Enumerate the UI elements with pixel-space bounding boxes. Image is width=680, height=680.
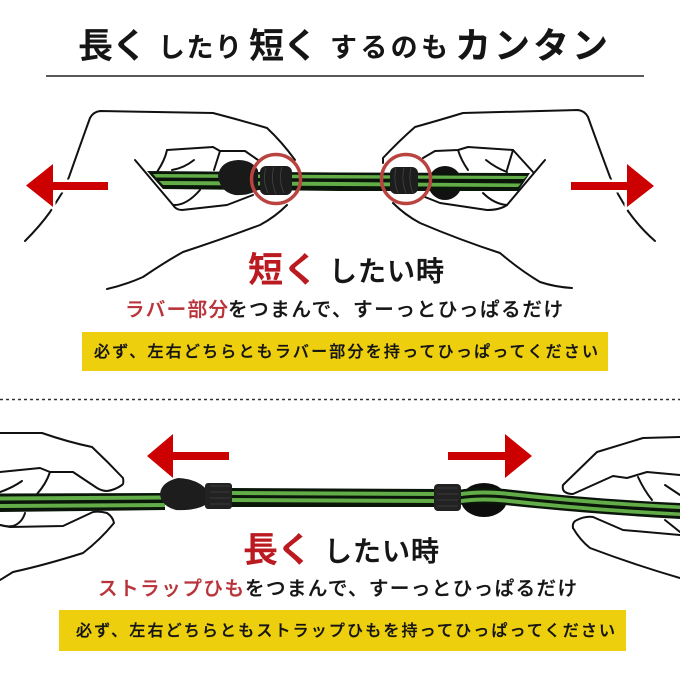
callout: shorten note [82, 332, 608, 371]
highlight circle, left [252, 154, 300, 204]
text: shorten instruction: をつまんで、すーっとひっぱるだけ [228, 299, 563, 321]
rubber stopper, right [390, 167, 418, 194]
arrow: right [448, 434, 532, 478]
title: 長く [78, 27, 147, 66]
strap [147, 171, 530, 191]
rubber stopper, left [260, 166, 292, 195]
icon: right hand outline [383, 110, 655, 288]
title: したり [158, 33, 242, 63]
title [78, 25, 608, 66]
text: lengthen instruction: ストラップひも [98, 578, 244, 600]
strap [0, 488, 680, 519]
callout: lengthen note: 必ず、左右どちらともストラップひもを持ってひっぱってください [76, 622, 615, 640]
title: 短く [249, 27, 318, 66]
panel: shorten illustration [25, 110, 655, 289]
arrow: right [571, 164, 654, 207]
text: lengthen instruction [98, 578, 577, 600]
title: するのも [330, 33, 448, 63]
heading: shorten [248, 251, 444, 290]
text: shorten instruction: ラバー部分 [125, 299, 228, 321]
icon: left hand outline [0, 433, 123, 580]
rubber stopper, left [205, 483, 232, 509]
callout: lengthen note [59, 610, 626, 651]
highlight circle, right [382, 154, 430, 204]
panel: lengthen illustration [0, 433, 680, 580]
heading: shorten: 短く [248, 251, 318, 290]
heading: lengthen: したい時 [324, 536, 439, 567]
heading: lengthen: 長く [243, 531, 312, 570]
arrow: left [26, 164, 108, 207]
rubber stopper ball, right [428, 166, 462, 200]
callout: shorten note: 必ず、左右どちらともラバー部分を持ってひっぱってください [94, 343, 598, 361]
icon: right hand outline [563, 437, 680, 578]
rubber ball, left [160, 478, 207, 510]
heading: lengthen [243, 531, 439, 570]
title: カンタン [455, 25, 608, 66]
rubber stopper, right [434, 484, 461, 511]
rubber ball over strap, left [218, 160, 258, 195]
heading: shorten: したい時 [329, 256, 444, 287]
icon: left hand outline [25, 111, 295, 289]
text: lengthen instruction: をつまんで、すーっとひっぱるだけ [245, 578, 577, 600]
rubber ball, right, behind strap [461, 483, 507, 517]
arrow: left [147, 434, 229, 478]
